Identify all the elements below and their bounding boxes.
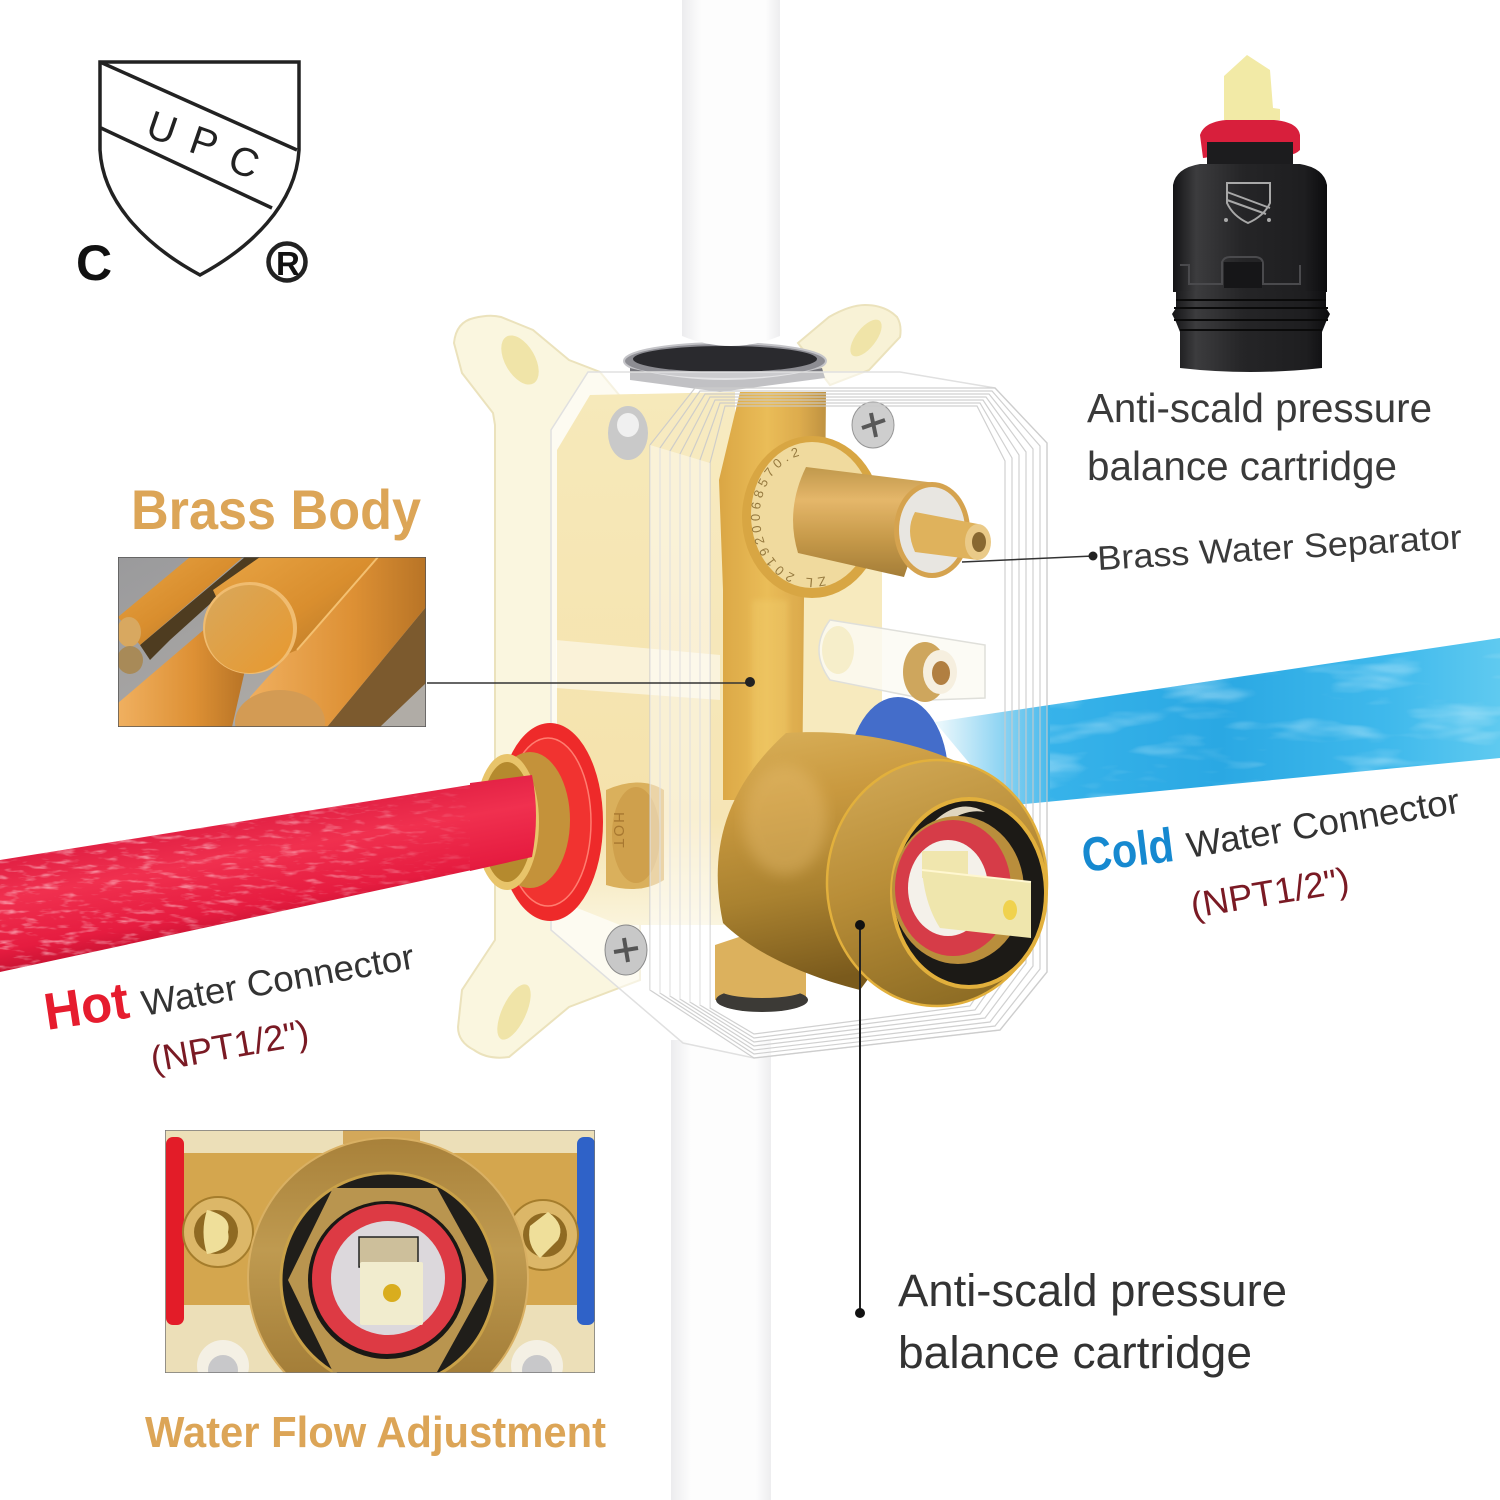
rear cream plastic panel (557, 392, 735, 925)
label: hot water connector: Water Connector (138, 936, 417, 1024)
mounting frame and ears (454, 305, 901, 1058)
icon: cUPC certification shield: U (141, 103, 183, 154)
caption: water flow adjustment: Water Flow Adjustment (145, 1408, 606, 1457)
cold water pipe (935, 638, 1500, 804)
brass water separator (742, 436, 991, 598)
photo: water flow adjustment (165, 1130, 595, 1373)
blue o-ring (848, 697, 948, 853)
hot inlet fitting (470, 723, 664, 921)
leader line: brass water separator (962, 552, 1098, 562)
icon: cUPC certification shield: P (184, 118, 224, 168)
cartridge product photo (1172, 55, 1330, 372)
icon: cUPC certification shield: R (276, 245, 300, 282)
leader line: bottom cartridge (855, 920, 865, 1318)
leader line: brass body (427, 677, 755, 687)
hot inlet fitting: HOT (610, 812, 627, 850)
transverse clear band (556, 640, 720, 700)
label: bottom cartridge (898, 1265, 1287, 1378)
top cap and upper white pipe (624, 0, 826, 392)
label: hot water connector: Hot (40, 972, 133, 1042)
label: top cartridge (1087, 385, 1432, 489)
photo: brass rods (118, 557, 426, 727)
label: bottom cartridge: balance cartridge (898, 1327, 1252, 1378)
vertical white pipe, bottom section (671, 1040, 771, 1500)
label: cold water connector: Water Connector (1184, 780, 1463, 866)
clear outlet nipple with brass insert (819, 620, 985, 702)
brass cartridge housing (718, 732, 1047, 1006)
screws (605, 402, 894, 975)
brass valve body (715, 392, 826, 1012)
icon: cUPC certification shield (76, 62, 306, 291)
cream panel right of body (790, 560, 882, 740)
icon: cUPC certification shield: C (76, 235, 112, 291)
label: cold water connector (1079, 780, 1463, 926)
icon: cUPC certification shield: C (223, 137, 265, 188)
label: brass water separator: Brass Water Separator (1096, 518, 1463, 578)
clear housing ribs (650, 388, 1047, 1058)
left rib band tint (650, 445, 710, 1008)
label: top cartridge: Anti-scald pressure (1087, 385, 1432, 431)
label: cold water connector: Cold (1079, 819, 1177, 883)
brass water separator: ZL 20192006857​0.2 (750, 448, 826, 588)
label: hot water connector: (NPT1/2") (147, 1012, 312, 1080)
cartridge stem (922, 851, 1031, 938)
label: hot water connector (40, 936, 417, 1080)
label: cold water connector: (NPT1/2") (1188, 859, 1352, 926)
heading: brass body: Brass Body (131, 478, 421, 541)
clear rear shell (551, 372, 1047, 1058)
label: top cartridge: balance cartridge (1087, 443, 1397, 489)
hot water pipe (0, 784, 470, 972)
label: bottom cartridge: Anti-scald pressure (898, 1265, 1287, 1316)
